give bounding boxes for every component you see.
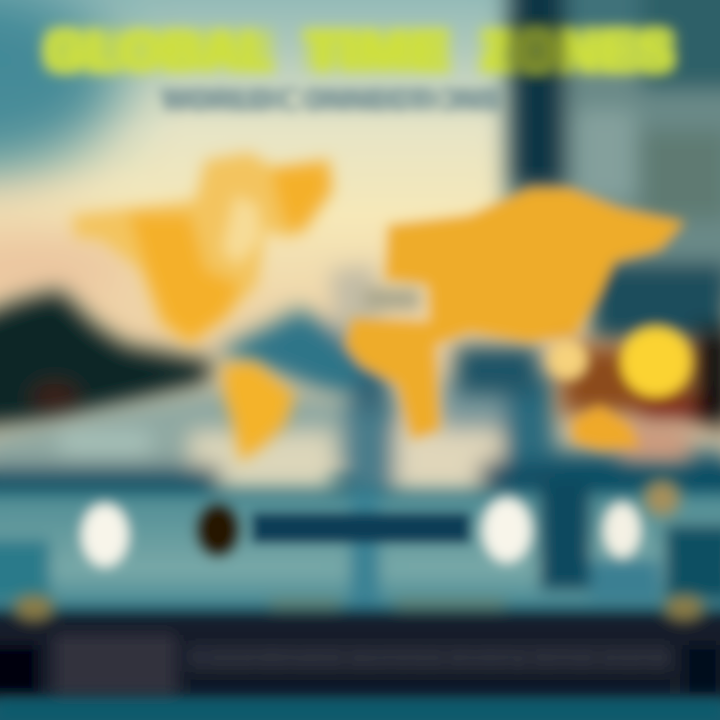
South America	[224, 362, 295, 462]
icon: large yellow sun	[620, 326, 692, 398]
background: sky	[0, 0, 720, 470]
icon: white clock 1	[81, 503, 129, 567]
North America base	[72, 152, 334, 345]
background: dark hills	[0, 290, 215, 428]
title shadow over dark pillar	[508, 24, 566, 74]
background: dark teal shadow below map	[355, 345, 540, 410]
footer text: Coordinate across every time zone	[190, 644, 670, 669]
sun cluster backdrop	[560, 330, 720, 462]
icon: small sun	[548, 340, 588, 380]
icon: dark clock	[197, 504, 239, 556]
world map	[72, 152, 685, 462]
title: ZONES	[480, 19, 674, 82]
icon: white clock 2	[482, 497, 532, 563]
North America saturated core	[130, 165, 328, 340]
time zone bar	[252, 513, 470, 543]
title	[44, 19, 674, 82]
Eurasia and Africa	[345, 188, 685, 440]
background: central mountain	[215, 265, 385, 400]
subtitle: WORLD CONNECTIONS	[160, 81, 500, 118]
title: TIME	[304, 19, 450, 82]
North America pale interior	[222, 195, 262, 265]
grey gap between Europe and Africa	[364, 288, 420, 310]
footer panel	[0, 612, 720, 698]
background: bridge and roadway	[0, 375, 720, 500]
bottom teal strip	[0, 702, 720, 720]
icon: white clock 3	[603, 502, 641, 558]
background: teal haze at upper left	[0, 0, 150, 295]
footer gold accents	[14, 595, 704, 621]
Australia	[572, 405, 640, 450]
background: right building	[505, 0, 720, 342]
title: GLOBAL	[44, 19, 274, 82]
icon: gold marker	[644, 480, 680, 516]
background: lower teal band	[0, 480, 720, 612]
